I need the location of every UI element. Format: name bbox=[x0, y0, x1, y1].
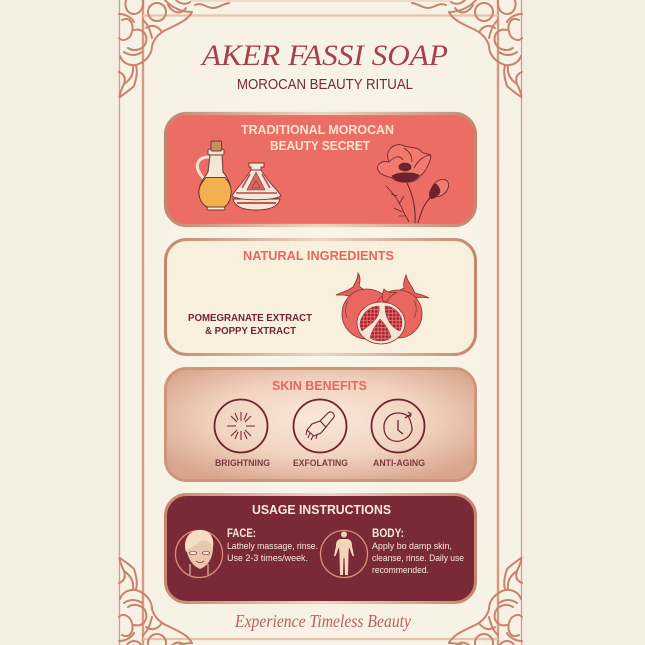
text: extracts: & POPPY EXTRACT bbox=[205, 325, 297, 337]
benefit: brightening bbox=[214, 400, 270, 469]
text: body instructions: Apply bo damp skin, bbox=[372, 541, 452, 552]
text: body instructions bbox=[372, 528, 464, 576]
benefit: exfoliating: EXFOLATING bbox=[293, 458, 348, 469]
icon: body bbox=[320, 530, 368, 578]
benefit: brightening: BRIGHTNING bbox=[215, 458, 270, 469]
benefit: anti-aging: ANTI-AGING bbox=[373, 458, 425, 469]
heading: traditional secret: TRADITIONAL MOROCAN bbox=[241, 123, 394, 137]
frame lines bbox=[120, 0, 522, 645]
corner ornament: bottom left bbox=[119, 558, 229, 645]
text: body instructions: BODY: bbox=[372, 528, 404, 540]
text: body instructions: cleanse, rinse. Daily use bbox=[372, 553, 464, 564]
panel: traditional secret bbox=[166, 114, 476, 226]
benefit: anti-aging bbox=[372, 400, 425, 469]
icon: face bbox=[176, 530, 222, 578]
corner ornament: top left bbox=[119, 0, 229, 97]
text: body instructions: recommended. bbox=[372, 565, 429, 576]
subtitle: MOROCAN BEAUTY RITUAL bbox=[237, 77, 413, 93]
paper panel bbox=[119, 0, 522, 645]
text: extracts: POMEGRANATE EXTRACT bbox=[188, 312, 313, 324]
icon: poppy bbox=[377, 145, 452, 223]
corner ornament: top right bbox=[412, 0, 522, 97]
icon: oil bottle bbox=[197, 141, 231, 210]
panel: skin benefits bbox=[166, 368, 476, 480]
footer tagline: Experience Timeless Beauty bbox=[234, 611, 411, 631]
text: face instructions: Use 2-3 times/week. bbox=[227, 553, 308, 564]
icon: tagine bbox=[232, 163, 281, 210]
heading: natural ingredients: NATURAL INGREDIENTS bbox=[243, 249, 394, 263]
text: face instructions: Lathely massage, rinse. bbox=[227, 541, 318, 552]
heading: skin benefits: SKIN BENEFITS bbox=[272, 379, 367, 393]
text: face instructions: FACE: bbox=[227, 528, 256, 540]
icon: pomegranate bbox=[336, 273, 429, 344]
panel: usage instructions bbox=[166, 494, 476, 602]
panel: natural ingredients bbox=[166, 240, 476, 354]
heading: traditional secret: BEAUTY SECRET bbox=[270, 139, 370, 153]
corner ornament: bottom right bbox=[412, 558, 522, 645]
title: AKER FASSI SOAP bbox=[200, 39, 448, 72]
heading: usage instructions: USAGE INSTRUCTIONS bbox=[252, 502, 391, 517]
benefit: exfoliating bbox=[293, 400, 348, 469]
text: face instructions bbox=[227, 528, 318, 564]
